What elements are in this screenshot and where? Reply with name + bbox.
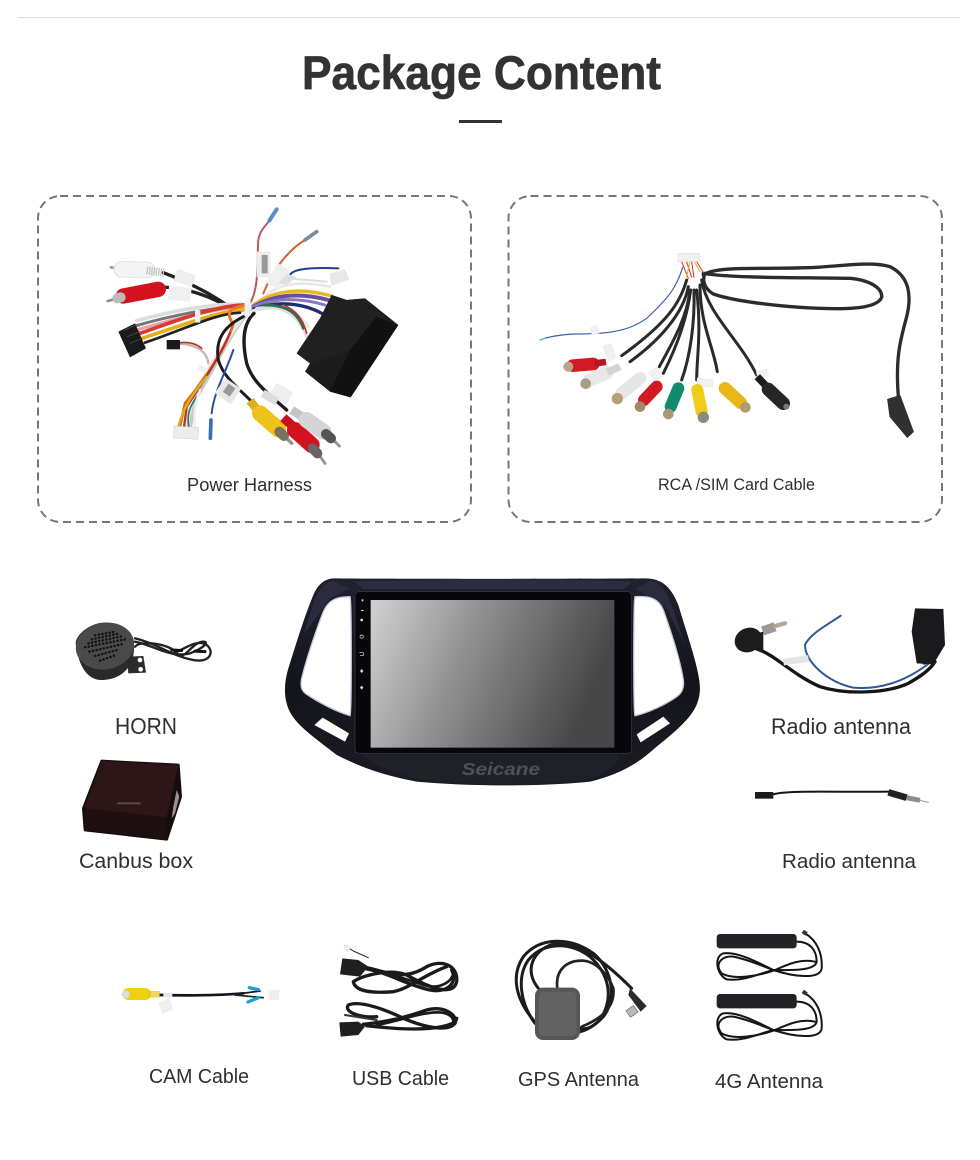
image: radio antenna cable: [755, 792, 928, 802]
image: USB cables: [339, 944, 457, 1037]
sub: black junction box: [297, 295, 398, 397]
label: USB cable: USB Cable: [352, 1068, 449, 1090]
sub: red female RCA 2: [635, 387, 657, 412]
sub: red female RCA: [563, 362, 606, 372]
item: radio antenna adapter: [731, 608, 945, 739]
label: 4G antenna: 4G Antenna: [715, 1071, 824, 1093]
image: canbus box: [83, 761, 181, 839]
sub: white connectors and tags: [168, 252, 349, 440]
image: 4G antennas: [717, 930, 822, 1040]
label: GPS antenna: GPS Antenna: [518, 1069, 640, 1091]
sub: right slot: [637, 717, 670, 742]
sub: screen: [371, 600, 614, 748]
panel: RCA / SIM card cable: [508, 196, 942, 522]
sub: left window: [301, 597, 351, 716]
sub: audio jack: [757, 377, 789, 410]
head unit: [285, 578, 700, 785]
sub: green female RCA: [663, 388, 678, 419]
panel: power harness: [38, 196, 471, 522]
sub: display frame: [355, 592, 632, 753]
sub: outer bezel: [285, 578, 700, 785]
title: Package Content: [302, 46, 661, 99]
sub: left black connector: [118, 323, 146, 357]
sub: wire tags: [589, 325, 769, 388]
label: RCA / SIM card cable: RCA /SIM Card Cable: [658, 476, 815, 494]
image: horn speaker: [72, 618, 211, 680]
sub: top white connector: [678, 253, 703, 278]
sub: white RCA plug (bottom): [292, 410, 339, 446]
sub: lower wire bundle: [178, 310, 250, 427]
sub: yellow RCA plug: [250, 401, 292, 443]
item: USB cable: [339, 944, 457, 1090]
sub: left slot: [314, 718, 349, 742]
sub: white RCA plug: [111, 267, 164, 273]
sub: wire clips: [195, 300, 251, 374]
sub: yellow female RCA: [697, 390, 709, 423]
image: radio antenna adapter: [731, 608, 945, 692]
sub: grille dots: [85, 632, 125, 661]
sub: touch buttons: [359, 599, 364, 690]
image: power harness wiring: [108, 209, 398, 463]
item: 4G antenna: [715, 930, 824, 1093]
image: CAM cable: [125, 988, 279, 1014]
sub: left wire bundle: [135, 304, 247, 343]
item: CAM cable: [125, 988, 279, 1088]
image: GPS antenna: [516, 941, 647, 1040]
label: CAM cable: CAM Cable: [149, 1066, 249, 1088]
sub: white female RCA 2: [612, 378, 640, 404]
sub: right window: [634, 596, 684, 716]
label: radio antenna adapter: Radio antenna: [771, 714, 912, 739]
item: GPS antenna: [516, 941, 647, 1091]
label: radio antenna cable: Radio antenna: [782, 850, 917, 873]
sub: upper antenna: [717, 930, 822, 980]
sub: yellow female RCA 2: [725, 388, 751, 413]
label: canbus box: Canbus box: [79, 849, 193, 873]
item: radio antenna cable: [755, 792, 928, 873]
item: canbus box: [79, 761, 193, 873]
item: horn: [72, 618, 211, 739]
label: horn: HORN: [115, 713, 177, 739]
sub: lower antenna: [717, 990, 822, 1040]
label: power harness: Power Harness: [187, 475, 312, 495]
sub: brand text: Seicane: [462, 759, 540, 779]
sub: right wire bundle: [253, 291, 332, 337]
sub: red RCA plug (top): [108, 289, 158, 301]
image: RCA and SIM cable: [540, 253, 913, 437]
sub: white female RCA: [580, 367, 620, 389]
sub: black signal cables: [622, 280, 757, 380]
sub: red RCA plug (bottom): [283, 418, 325, 463]
